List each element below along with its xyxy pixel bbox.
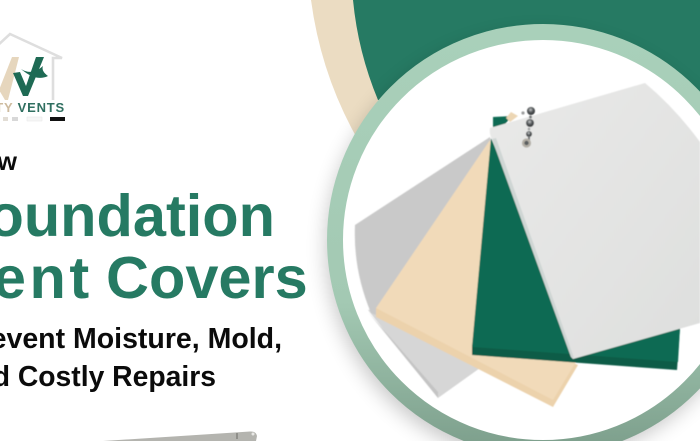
light gray sheet [490, 83, 700, 359]
green sheet [472, 116, 680, 370]
product edge at bottom [103, 431, 257, 441]
beige sheet [376, 140, 578, 407]
logo: house outline [0, 34, 62, 100]
logo: green check mark [13, 57, 44, 96]
title [0, 182, 308, 311]
logo: colour swatches [3, 117, 65, 121]
circle shadow [326, 34, 700, 441]
product circle ring [335, 32, 700, 441]
background crescent: beige [311, 0, 560, 200]
logo [0, 34, 65, 121]
subtitle [0, 323, 282, 392]
background disc: dark green [353, 0, 700, 120]
beige tab behind chain [506, 112, 518, 122]
gray sheet [355, 137, 500, 398]
title line 2: Covers [106, 244, 308, 311]
product photo: vent cover samples [355, 83, 700, 407]
logo: beige stroke [0, 57, 19, 100]
ball chain and rivet [521, 107, 535, 148]
